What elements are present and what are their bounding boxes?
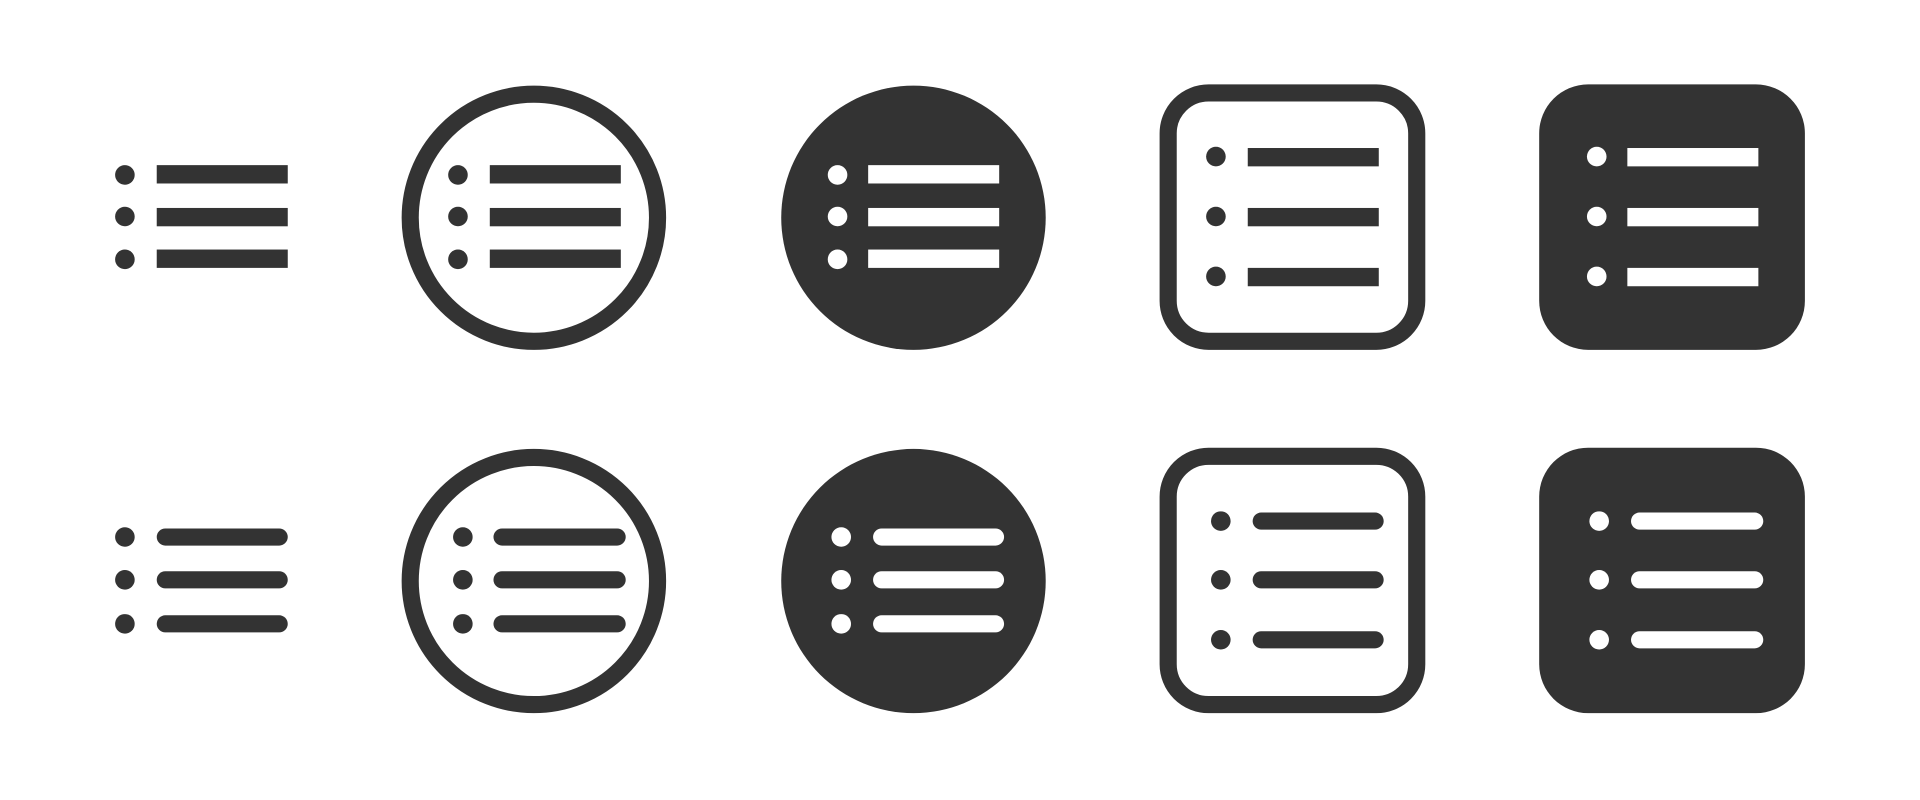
icon: filled circle list rounded [781,449,1046,713]
icon: outlined square list rounded [1168,456,1417,705]
icon: filled square list [1539,84,1805,350]
icon: outlined circle list rounded [410,457,658,705]
icon: filled circle list [781,86,1046,350]
icon: outlined circle list [410,94,658,341]
icon: filled square list rounded [1539,448,1805,713]
icon: plain list square bars [115,165,288,269]
icon: outlined square list [1168,93,1417,341]
icon: plain list rounded bars [115,527,279,634]
